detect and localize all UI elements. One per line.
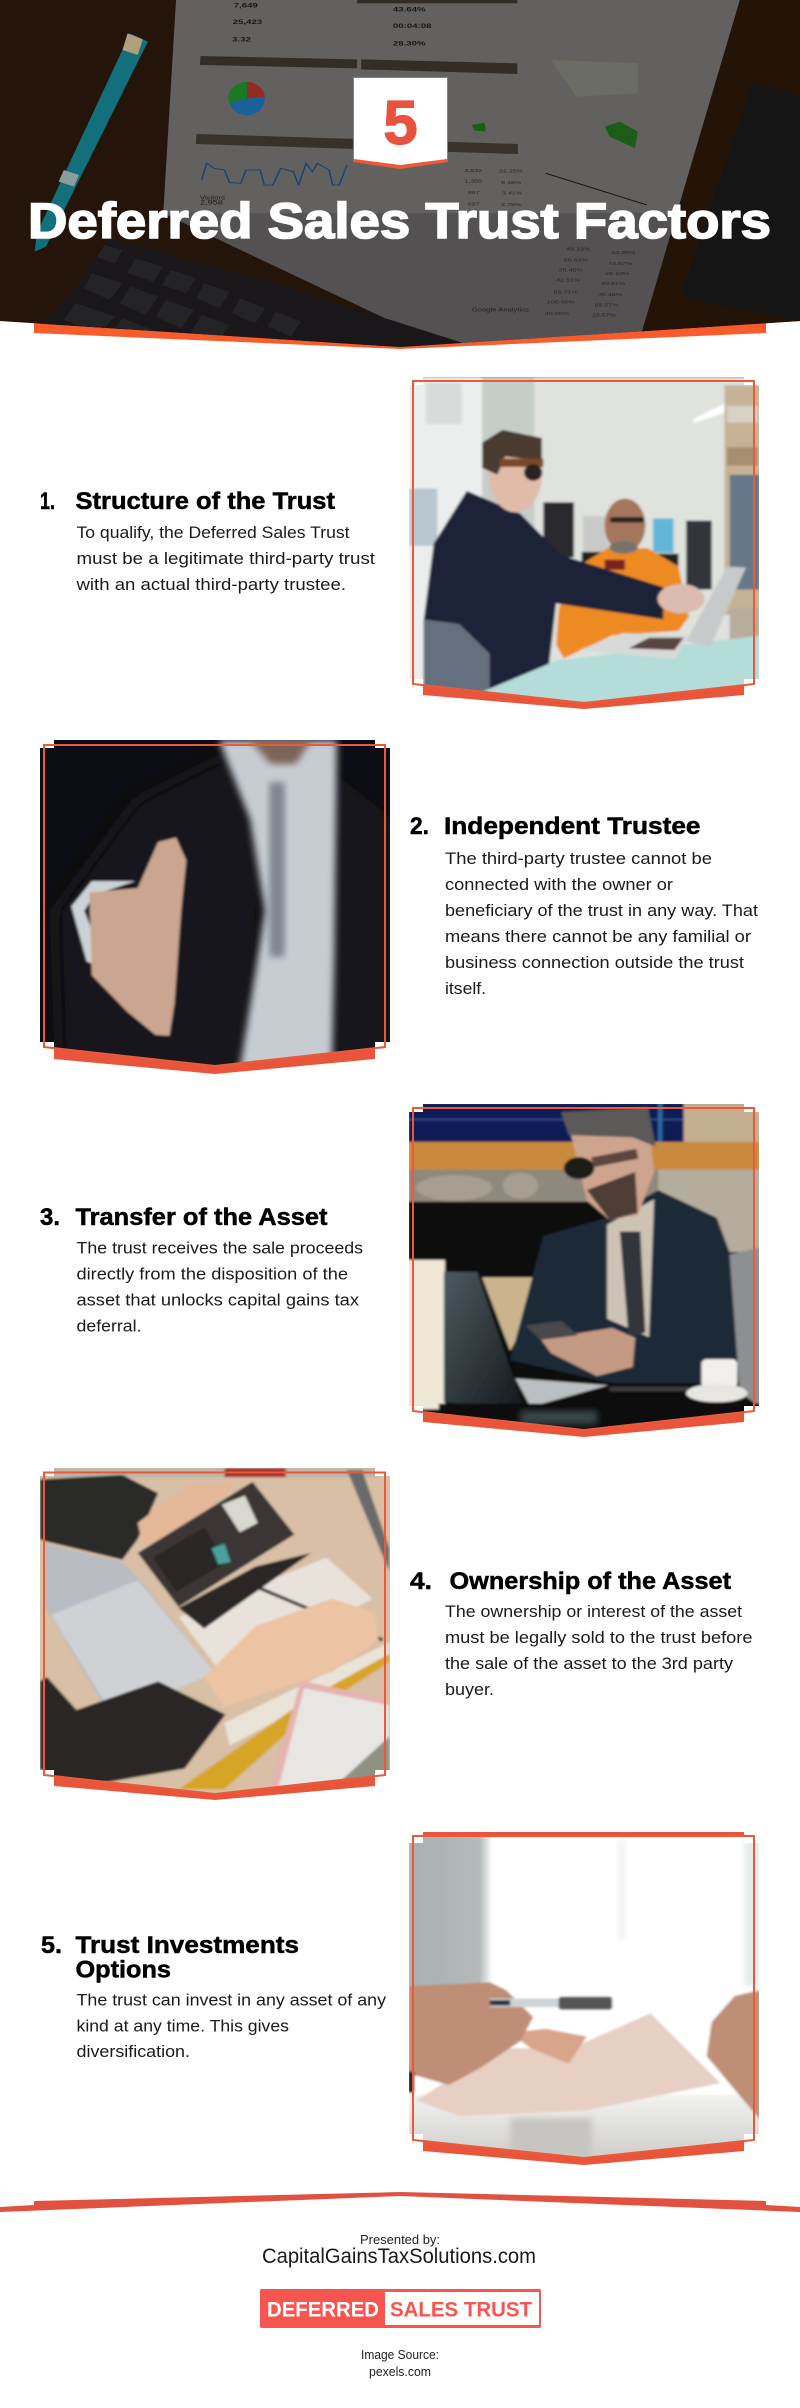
table figures: 100.00% (547, 300, 576, 305)
footer divider band (0, 2192, 800, 2212)
item 3 number: 3. (40, 1204, 60, 1231)
item 5 heading: Options (76, 1956, 171, 1984)
item 1 body: To qualify, the Deferred Sales Trust (76, 524, 350, 542)
hands and phone (541, 1328, 635, 1376)
item 1 number: 1. (40, 488, 55, 515)
item 4 number: 4. (410, 1568, 432, 1595)
image source: pexels.com (369, 2364, 431, 2379)
item 2 body: means there cannot be any familial or (445, 928, 752, 946)
orange shirt man (556, 548, 689, 658)
image source: Image Source: (361, 2347, 439, 2362)
item 1 body: must be a legitimate third-party trust (76, 550, 375, 568)
item 5 body: diversification. (76, 2043, 190, 2061)
table and laptop (482, 634, 759, 702)
writing hand and sleeve (258, 1587, 383, 1640)
face (569, 1126, 654, 1220)
pie chart (229, 82, 265, 115)
document (416, 2013, 720, 2116)
item 3 image frame (413, 1108, 754, 1430)
keyboard (40, 238, 463, 347)
table figures: 40.00% (545, 312, 570, 317)
table figures: 43.35% (611, 251, 636, 256)
table figures: 1,356 (464, 180, 483, 184)
pen (35, 33, 148, 252)
table figures: 29.10% (605, 272, 630, 277)
calculator (138, 1482, 294, 1607)
item 2 body: The third-party trustee cannot be (445, 850, 712, 868)
table figures: 2.75% (501, 203, 522, 208)
table figures (464, 169, 636, 318)
item 5 image frame (413, 1836, 754, 2158)
item 4: ownership of the asset (36, 1466, 753, 1805)
header photo: analytics report on desk: 28.30% (393, 40, 427, 47)
item 3 body: deferral. (76, 1318, 142, 1336)
item 2 heading: Independent Trustee (444, 813, 700, 840)
item 2 body: beneficiary of the trust in any way. That (445, 902, 758, 920)
badge number: 5 (383, 89, 418, 158)
pink folder (269, 1681, 389, 1789)
header accent bar (34, 323, 766, 349)
phone (684, 82, 800, 322)
top left sleeve (40, 1475, 158, 1560)
item 2 body: connected with the owner or (445, 876, 674, 894)
item 1 heading: Structure of the Trust (76, 488, 335, 515)
table strips (200, 56, 357, 68)
item 5 heading: Trust Investments (76, 1932, 299, 1959)
item 2 body (445, 850, 758, 998)
item 3 body: asset that unlocks capital gains tax (76, 1292, 360, 1310)
header photo: analytics report on desk: 3.32 (232, 36, 252, 43)
item 5 body: The trust can invest in any asset of any (76, 1992, 387, 2010)
item 1: structure of the trust (40, 377, 761, 718)
item 2 body: business connection outside the trust (445, 954, 744, 972)
item 3 body: The trust receives the sale proceeds (76, 1240, 363, 1258)
cup (702, 1359, 737, 1388)
table figures: 697 (468, 202, 481, 207)
table figures: 56.63% (564, 259, 589, 263)
item 5 body: kind at any time. This gives (76, 2018, 289, 2036)
item 4 heading: Ownership of the Asset (450, 1568, 731, 1595)
table figures: 88.57% (594, 304, 619, 308)
logo: deferred sales trust: SALES TRUST (390, 2298, 532, 2322)
item 4 body: the sale of the asset to the 3rd party (445, 1655, 734, 1673)
header photo: analytics report on desk: 25,423 (233, 19, 263, 26)
item 2 body: itself. (445, 980, 486, 998)
item 5 body (76, 1992, 387, 2061)
item 4 body: buyer. (445, 1681, 494, 1699)
item 4 body (445, 1603, 752, 1699)
item 5 photo: pen and document handover (408, 1831, 760, 2172)
pen (490, 1999, 559, 2007)
item 5 number: 5. (41, 1932, 62, 1959)
header photo: analytics report on desk (0, 0, 800, 360)
item 2 image accent (54, 740, 375, 1074)
table figures: 49.19% (566, 248, 591, 252)
number badge (353, 77, 448, 169)
header photo: analytics report on desk: 43.64% (393, 6, 427, 13)
table figures: 38.46% (598, 293, 623, 298)
item 5 heading (76, 1932, 299, 1984)
item 5: trust investments options (41, 1831, 760, 2172)
laptop (444, 1272, 521, 1409)
item 3 heading: Transfer of the Asset (76, 1204, 328, 1231)
item 2: independent trustee (36, 736, 758, 1081)
item 1 image frame (413, 381, 754, 703)
item 3 photo: businessman with phone and laptop (408, 1103, 760, 1443)
right hands (707, 1990, 760, 2120)
table figures: 35.45% (559, 269, 584, 273)
item 3: transfer of the asset (40, 1103, 760, 1443)
header banner (0, 0, 800, 360)
footer (260, 2232, 541, 2379)
left hand (510, 2029, 587, 2064)
presented by label: Presented by: (360, 2232, 440, 2247)
logo: deferred sales trust (260, 2289, 541, 2328)
table figures: 74.67% (608, 262, 633, 267)
item 2 image frame (44, 745, 385, 1066)
report text: 7,649 (234, 2, 258, 9)
map (605, 122, 638, 148)
table figures: 9.16% (501, 181, 522, 186)
item 4 body: The ownership or interest of the asset (445, 1603, 742, 1621)
table figures: 65.71% (554, 290, 578, 295)
header photo: analytics report on desk: 00:04:08 (393, 23, 432, 30)
item 1 body: with an actual third-party trustee. (75, 576, 346, 594)
table (437, 1402, 759, 1428)
item 3 body (76, 1240, 363, 1336)
table figures: 22.25% (499, 170, 524, 174)
suit (510, 1190, 747, 1383)
line chart (202, 163, 347, 185)
item 3 body: directly from the disposition of the (76, 1266, 348, 1284)
image source (361, 2347, 439, 2379)
item 5 image accent (423, 1832, 744, 2165)
table figures: 42.51% (556, 279, 581, 283)
item 2 photo: offered handshake (36, 736, 393, 1081)
table figures: 40.91% (601, 282, 626, 287)
item 1 photo: two men at a laptop (409, 377, 761, 718)
item 4 image accent (54, 1468, 375, 1800)
item 4 body: must be legally sold to the trust before (445, 1629, 752, 1647)
item 1 image accent (423, 377, 744, 709)
item 4 image frame (44, 1472, 385, 1794)
navy suit man (423, 491, 663, 693)
dark overlay (0, 0, 800, 347)
item 4 photo: calculator and binder (36, 1466, 393, 1805)
title: Deferred Sales Trust Factors (28, 193, 771, 249)
header photo: analytics report on desk: 2,958 (200, 199, 223, 206)
table figures: 867 (468, 191, 481, 196)
header photo: analytics report on desk: Visitors (200, 195, 225, 201)
table figures: 3,532 (464, 169, 483, 174)
table figures: 3.41% (502, 192, 523, 196)
website name: CapitalGainsTaxSolutions.com (262, 2245, 536, 2268)
item 3 image accent (423, 1104, 744, 1437)
header photo: analytics report on desk: Google Analytics (472, 308, 529, 313)
item 1 body (75, 524, 375, 594)
logo: deferred sales trust: DEFERRED (267, 2298, 379, 2322)
table figures: 18.57% (592, 314, 617, 318)
item 2 number: 2. (410, 813, 429, 840)
